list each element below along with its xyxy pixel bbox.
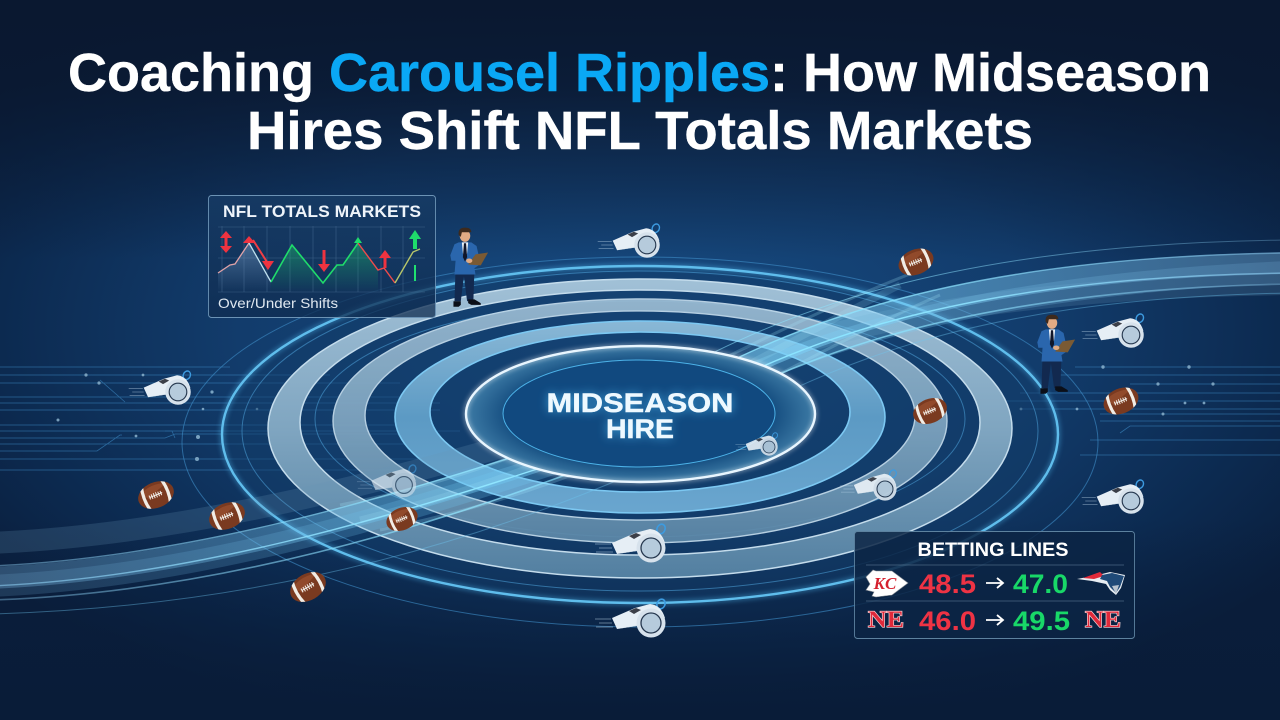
panel heading: NFL TOTALS MARKETS [223, 203, 421, 221]
football 3 [383, 502, 421, 536]
center disc [466, 346, 815, 482]
circuit lines right [1000, 365, 1280, 455]
thin ring 3 [315, 301, 965, 537]
ripple band 2 [333, 299, 947, 543]
panel: NFL totals markets [208, 196, 436, 318]
coach left [450, 228, 488, 307]
center label: Midseason Hire: MIDSEASON [546, 388, 734, 418]
whistle: top [598, 223, 661, 258]
swoosh waves [0, 240, 1280, 614]
whistle: right upper [1082, 313, 1145, 348]
row 2: 46.0 [919, 606, 976, 636]
line chart [218, 226, 425, 292]
arrow [986, 615, 1003, 625]
football 5 [894, 243, 938, 281]
icon: patriots head [1077, 572, 1125, 595]
football 1 [134, 476, 178, 514]
whistle: lower center [595, 523, 667, 562]
icon: chiefs arrowhead [866, 570, 908, 597]
arrow [986, 578, 1003, 588]
circuit lines left [0, 367, 460, 470]
title: Coaching Carousel Ripples: How Midseason [68, 43, 1211, 103]
whistle: left [129, 370, 192, 405]
whistle: bottom [595, 598, 667, 638]
title [68, 43, 1211, 161]
ripple band 3 [395, 321, 885, 513]
whistle: ring right [840, 469, 898, 501]
row 2: 49.5 [1013, 606, 1070, 636]
panel caption: Over/Under Shifts [218, 295, 338, 311]
icon: NE logo right [1085, 607, 1121, 632]
ripple band 1 [268, 279, 1012, 578]
title: Hires Shift NFL Totals Markets [247, 101, 1033, 161]
row 1: 47.0 [1013, 569, 1068, 599]
row 1: 48.5 [919, 569, 976, 599]
center label: Midseason Hire: HIRE [606, 414, 674, 444]
thin ring 2 [242, 271, 1038, 591]
center label: Midseason Hire: MIDSEASON [546, 388, 734, 418]
row 1 [866, 569, 1125, 599]
center label: Midseason Hire: HIRE [606, 414, 674, 444]
whistle: center small [735, 432, 778, 456]
row 2 [868, 606, 1121, 636]
football 6 [909, 393, 951, 429]
football 4 [285, 566, 331, 608]
panel heading: BETTING LINES [918, 540, 1068, 561]
whistle: right lower [1082, 479, 1145, 514]
icon: NE logo left [868, 607, 904, 632]
football 7 [1099, 382, 1143, 420]
icon: chiefs arrowhead: KC [873, 574, 897, 593]
ripple rings [182, 257, 1098, 627]
bright outer ring [222, 266, 1058, 603]
panel: betting lines [854, 532, 1134, 638]
football 2 [205, 497, 249, 535]
whistle: faded on ring [357, 464, 417, 497]
coach right [1037, 315, 1075, 394]
center label: Midseason Hire [546, 388, 734, 444]
outer thin ring [182, 257, 1098, 627]
